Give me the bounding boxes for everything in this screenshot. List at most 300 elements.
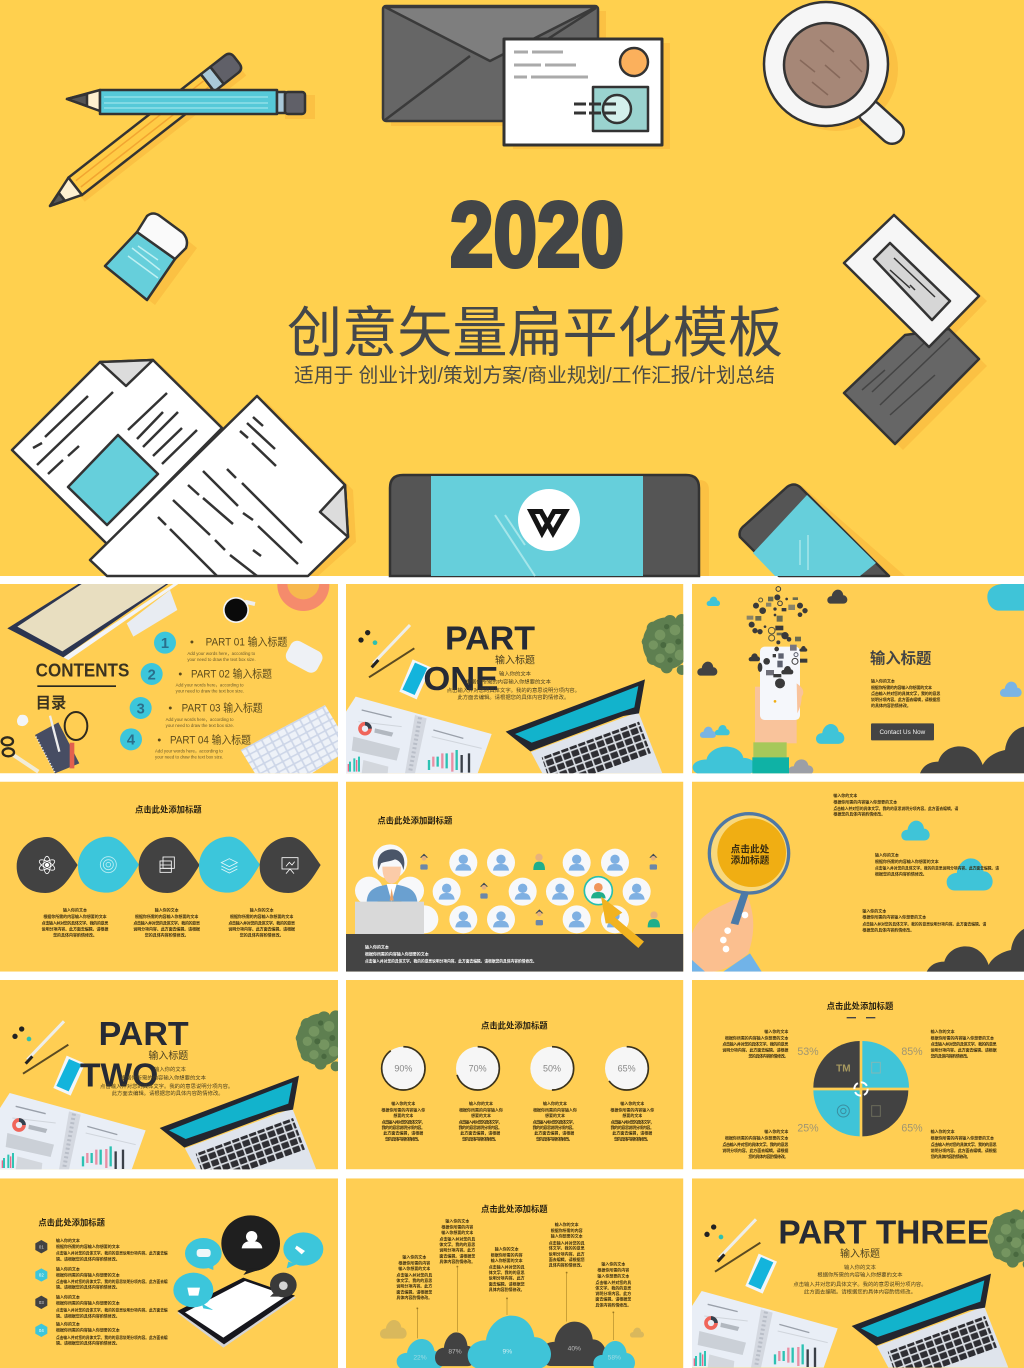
bubble: gamepad (185, 1238, 222, 1270)
agenda item 2: 2 (148, 667, 156, 683)
title: 点击此处添加标题 (481, 1021, 548, 1031)
body text: 根据你所需的内容输入你想要的文本 (871, 684, 932, 690)
body text: 此方面去编辑。请根据您的具体内容酌情修改。 (457, 693, 569, 701)
body text: 根据你所需的内容输入你想要的文本 (121, 1073, 207, 1081)
text block bottom left (722, 1128, 788, 1159)
hand holding phone (752, 647, 803, 774)
heading: part three: PART THREE (778, 1214, 989, 1251)
text column 1: 根据你所需的内容 (398, 1259, 430, 1265)
text block top right: 点击输入并对您的具体文字。我的的意思 (931, 1041, 997, 1047)
icon: yellow pencil (43, 51, 248, 220)
text block 2 (459, 1100, 503, 1141)
text block 1: 根据你所需的内容输入你想要的文本 (43, 913, 107, 919)
text column 3: 点击输入并对您的具 (489, 1264, 525, 1270)
button (871, 723, 934, 740)
icon: eraser (105, 214, 197, 305)
panel: contents slide (0, 584, 338, 774)
text column 5: 面去编辑。请根据您 (595, 1296, 631, 1302)
body text: 此方面去编辑。请根据您的具体内容酌情修改。 (112, 1089, 224, 1097)
ring 65% (605, 1047, 648, 1090)
heading: 输入标题 (870, 649, 931, 667)
text column 2: 输入你的文本 (445, 1217, 469, 1223)
drop 4 with layers icon (199, 837, 260, 893)
hero background (0, 0, 1024, 576)
text block 1 (42, 907, 108, 937)
text column 4: 输入你的文本 (555, 1221, 579, 1227)
text block 4: 您的具体内容酌情修改。 (614, 1135, 651, 1141)
text block 1: 根据你所需的内容输入你 (381, 1106, 425, 1112)
text block 3: 输入你的文本 (543, 1100, 567, 1106)
text block top left: 点击输入并对您的具体文字。我的的意思 (722, 1041, 788, 1047)
text column 5: 输入你想要的文本 (597, 1272, 629, 1278)
text block 3: 输入你的文本 (250, 907, 274, 913)
heading: part two: PART (99, 1016, 189, 1053)
band text: 点击输入并对您的具体文字。我的的意思说明分项内容。此方面去编辑。请根据您的具体内容酌情修改。 (365, 958, 537, 964)
leader lines (417, 1266, 614, 1340)
text block top left: 说明分项内容。此方面去编辑。请根据 (722, 1047, 788, 1053)
magnifier: 点击此处 (731, 844, 770, 856)
item 03 (35, 1294, 168, 1319)
bubble: user (221, 1215, 280, 1275)
text block 1: 根据你所需的内容输入你想要的文本 (833, 798, 897, 804)
icon: tablet with logo (390, 475, 709, 576)
agenda item 3: Add your words here，according to (166, 717, 234, 723)
item 03: 点击输入并对您的具体文字。我的的意思说明分项内容。此方面去编 (56, 1307, 168, 1313)
item 04 (35, 1321, 168, 1346)
text block 4: 我的的意思说明分项内容。 (611, 1124, 654, 1130)
body text (871, 677, 940, 708)
panel: cloud data slide (346, 1178, 683, 1368)
text column 3: 根据你所需的内容 (491, 1251, 523, 1257)
text block bottom right: 您的具体内容酌情修改。 (931, 1153, 971, 1159)
icon: business cards (844, 215, 987, 450)
text block top left: 根据你所需的内容输入你想要的文本 (725, 1035, 788, 1041)
text block bottom left: 说明分项内容。此方面去编辑。请根据 (722, 1147, 788, 1153)
item 01: 点击输入并对您的具体文字。我的的意思说明分项内容。此方面去编 (56, 1250, 168, 1256)
text block 1: 您的具体内容酌情修改。 (53, 931, 97, 937)
body text: 点击输入并对您的具体文字，我的的意思 (871, 690, 940, 696)
text block 4: 输入你的文本 (620, 1100, 644, 1106)
agenda item 4: Add your words here，according to (155, 749, 223, 755)
heading: part one (424, 626, 535, 690)
text column 4: 体文字。我的的意思 (549, 1245, 585, 1251)
text block bottom right: 说明分项内容。此方面去编辑。请根据 (931, 1147, 997, 1153)
text column 4: 输入你想要的文本 (551, 1233, 583, 1239)
item 03: 输入你的文本 (56, 1294, 80, 1300)
text column 3: 输入你想要的文本 (491, 1257, 523, 1263)
text column 1: 说明分项内容。此方 (396, 1283, 432, 1289)
item 01: 根据你所需的内容输入你想要的文本 (56, 1243, 120, 1249)
text block 2: 输入你的文本 (155, 907, 179, 913)
button: Contact Us Now (879, 729, 926, 736)
ring 50%: 50% (543, 1064, 561, 1074)
text block 1: 根据您的具体内容酌情修改。 (833, 811, 885, 817)
agenda item 2: Add your words here，according to (176, 683, 244, 689)
item 01: 输入你的文本 (56, 1237, 80, 1243)
item 02: 点击输入并对您的具体文字。我的的意思说明分项内容。此方面去编 (56, 1278, 168, 1284)
text block 1: 您的具体内容酌情修改。 (385, 1135, 422, 1141)
icon: postcard (504, 39, 670, 149)
text column 1: 点击输入并对您的具 (396, 1272, 432, 1278)
text block 4: 想要的文本 (622, 1112, 642, 1118)
text column 3: 说明分项内容。此方 (489, 1275, 525, 1281)
subtitle: 适用于 创业计划/策划方案/商业规划/工作汇报/计划总结 (294, 364, 775, 387)
item 02 (35, 1265, 168, 1290)
text block 3 (862, 907, 986, 932)
agenda item 3: • (168, 702, 172, 714)
ring 65%: 65% (618, 1064, 636, 1074)
panel: part one slide (346, 584, 691, 773)
fingers (720, 912, 748, 952)
agenda item 1 (154, 632, 287, 662)
title: 点击此处添加副标题 (377, 816, 453, 826)
year heading: 2020 (450, 184, 624, 286)
percentages: 65% (901, 1123, 923, 1135)
ring 90%: 90% (394, 1064, 412, 1074)
text block top right: 说明分项内容。此方面去编辑。请根据 (931, 1047, 997, 1053)
band text: 根据你所需的内容输入你想要的文本 (365, 951, 429, 957)
panel: phone slide (692, 584, 1024, 775)
item 02: 辑。请根据您的具体内容酌情修改。 (56, 1284, 120, 1290)
text block 2 (133, 907, 200, 937)
heading: part one: PART (445, 620, 535, 657)
text block 1 (833, 792, 958, 817)
body text: 此方面去编辑。请根据您的具体内容酌情修改。 (804, 1287, 916, 1295)
desk illustration (346, 614, 691, 773)
agenda item 1: • (190, 636, 194, 648)
text block 2: 输入你的文本 (469, 1100, 493, 1106)
ring 90% (382, 1047, 425, 1090)
text column 2: 输入你想要的文本 (441, 1229, 473, 1235)
desk illustration (0, 1010, 345, 1170)
body text: 根据你所需的内容输入你想要的文本 (466, 677, 552, 685)
body text: 的具体内容酌情修改。 (871, 702, 911, 708)
heading: contents (36, 664, 129, 710)
cloud values (413, 1345, 621, 1362)
text block top left: 输入你的文本 (764, 1028, 788, 1034)
hand (692, 898, 753, 972)
drop 1 with atom icon (17, 837, 78, 893)
percentages (797, 1046, 923, 1135)
drop 2 with target icon (78, 837, 139, 893)
title: 点击此处添加标题 (38, 1217, 106, 1227)
pie chart: TM (836, 1064, 851, 1075)
text column 5: 说明分项内容。此方 (595, 1290, 631, 1296)
agenda item 3: your need to draw the text box size. (166, 723, 234, 728)
item 02: 02 (39, 1273, 44, 1278)
clouds (380, 1316, 644, 1368)
body text (793, 1263, 927, 1295)
title (827, 1001, 894, 1018)
text block 2: 说明分项内容。此方面去编辑。请根据 (133, 925, 200, 931)
mouse (286, 640, 322, 673)
text block 3 (228, 907, 295, 937)
text block top right: 您的具体内容酌情修改。 (931, 1053, 971, 1059)
text block 1: 输入你的文本 (833, 792, 857, 798)
text block 1: 说明分项内容。此方面去编辑。请根据 (42, 925, 108, 931)
text block 3: 根据您的具体内容酌情修改。 (862, 926, 914, 932)
text block 2: 点击输入并对您的具体文字， (459, 1118, 502, 1124)
text column 4: 根据你所需的内容 (551, 1227, 583, 1233)
text block 3: 点击输入并对您的具体文字。我的的意思 (228, 920, 295, 926)
text block bottom left: 您的具体内容酌情修改。 (748, 1153, 788, 1159)
text block 4: 根据你所需的内容输入你 (610, 1106, 654, 1112)
item 03: 辑。请根据您的具体内容酌情修改。 (56, 1313, 120, 1319)
text block 3: 根据你所需的内容输入你想要的文本 (230, 913, 293, 919)
text column 4: 具体内容酌情修改。 (549, 1262, 585, 1268)
agenda item 4 (120, 728, 251, 760)
magnifier: 添加标题 (731, 854, 770, 866)
text block 3: 点击输入并对您的具体文字， (533, 1118, 576, 1124)
percentages: 53% (797, 1046, 819, 1058)
drop 3 with film icon (139, 837, 200, 893)
item 04: 输入你的文本 (56, 1321, 80, 1327)
text column 2: 具体内容酌情修改。 (439, 1258, 475, 1264)
text block 2: 您的具体内容酌情修改。 (145, 931, 189, 937)
icon: smartphone (740, 484, 905, 576)
item 01: 辑。请根据您的具体内容酌情修改。 (56, 1255, 120, 1261)
agenda item 2: PART 02 输入标题 (191, 666, 272, 680)
ring 50% (530, 1047, 574, 1090)
item 03: 03 (39, 1300, 44, 1305)
icon: teal pencil (67, 90, 315, 119)
text column 5: 点击输入并对您的具 (595, 1279, 631, 1285)
agenda item 2 (141, 663, 272, 694)
desk items illustration (2, 712, 87, 773)
item 03: 根据你所需的内容输入你想要的文本 (56, 1300, 120, 1306)
panel: part three slide (692, 1178, 1024, 1368)
cloud values: 22% (413, 1355, 427, 1362)
band text: 输入你的文本 (365, 943, 389, 949)
subheading: 输入标题 (148, 1049, 188, 1062)
pie chart (813, 1041, 909, 1136)
panel: pie chart slide (692, 980, 1024, 1169)
presenter illustration (355, 844, 438, 934)
text column 1: 面去编辑。请根据您 (396, 1288, 432, 1294)
agenda item 1: Add your words here，according to (187, 651, 256, 657)
panel: magnifier slide (692, 782, 1024, 973)
cloud values: 9% (503, 1349, 512, 1356)
agenda item 2: • (178, 668, 182, 680)
coffee cup (223, 597, 255, 623)
text column 1: 输入你想要的文本 (398, 1265, 430, 1271)
heading: part two: TWO (80, 1058, 158, 1095)
cloud values: 58% (608, 1355, 621, 1362)
text block 2: 根据你所需的内容输入你想要的文本 (135, 913, 198, 919)
bubble: basket (173, 1273, 213, 1310)
clouds (693, 584, 1024, 775)
agenda item 3 (130, 697, 263, 728)
icon: paper document 1 (12, 360, 230, 549)
heading: part one: ONE (423, 661, 498, 698)
agenda item 4: • (157, 734, 161, 746)
text column 4 (549, 1221, 585, 1268)
text column 3: 面去编辑。请根据您 (489, 1280, 525, 1286)
percentages: 85% (901, 1046, 923, 1058)
monitor illustration (7, 584, 178, 660)
panel: tablet bubbles slide (0, 1178, 338, 1368)
text block 1: 点击输入并对您的具体文字。我的的意思 (42, 920, 108, 926)
text column 1 (396, 1253, 432, 1300)
bubble: plug (283, 1232, 323, 1268)
text block 1: 输入你的文本 (63, 907, 87, 913)
text column 2: 体文字。我的的意思 (439, 1241, 475, 1247)
text block 1: 点击输入并对您的具体文字， (382, 1118, 425, 1124)
text block bottom left: 根据你所需的内容输入你想要的文本 (725, 1135, 788, 1141)
text block 3: 说明分项内容。此方面去编辑。请根据 (228, 925, 295, 931)
text block top right (931, 1028, 997, 1059)
text block 1: 点击输入并对您的具体文字。我的的意思说明分项内容。此方面去编辑。请 (833, 805, 958, 811)
heading: part two (80, 1016, 189, 1095)
ring 70% (456, 1047, 499, 1090)
text block top right: 根据你所需的内容输入你想要的文本 (931, 1035, 994, 1041)
avatar grid (420, 849, 660, 933)
highlighted avatar (584, 877, 612, 905)
text column 3 (489, 1245, 525, 1292)
text block 3 (533, 1100, 577, 1141)
body text: 输入你的文本 (154, 1065, 187, 1073)
panel: teardrop process slide (0, 782, 338, 972)
text block bottom left: 输入你的文本 (764, 1128, 788, 1134)
text block 2: 输入你的文本 (875, 852, 899, 858)
tablet (177, 1278, 296, 1348)
text block 4: 点击输入并对您的具体文字， (611, 1118, 654, 1124)
text column 2: 说明分项内容。此方 (439, 1247, 475, 1253)
keyboard (241, 705, 338, 773)
text block bottom right (931, 1128, 997, 1159)
text column 1: 具体内容酌情修改。 (396, 1294, 432, 1300)
agenda item 1: 1 (161, 636, 169, 652)
magnifier (709, 814, 789, 925)
text block 3: 根据你所需的内容输入你 (533, 1106, 577, 1112)
body text: 根据你所需的内容输入你想要的文本 (817, 1271, 903, 1279)
text column 1: 输入你的文本 (402, 1253, 426, 1259)
cloud values: 40% (568, 1345, 581, 1352)
alarm clock (277, 584, 330, 611)
agenda item 3: PART 03 输入标题 (182, 700, 263, 714)
text block 3: 输入你的文本 (862, 907, 886, 913)
text block 2: 根据您的具体内容酌情修改。 (875, 871, 927, 877)
text block 3: 您的具体内容酌情修改。 (536, 1135, 573, 1141)
item 01 (35, 1237, 168, 1261)
text block 4 (610, 1100, 654, 1141)
heading: contents: 目录 (36, 695, 66, 712)
text block 2 (875, 852, 999, 877)
text column 4: 点击输入并对您的具 (549, 1239, 585, 1245)
main title: 创意矢量扁平化模板 (287, 302, 783, 364)
item 04: 根据你所需的内容输入你想要的文本 (56, 1327, 120, 1333)
text block 3: 想要的文本 (545, 1112, 565, 1118)
agenda item 1: PART 01 输入标题 (206, 634, 287, 648)
heading: contents: CONTENTS (36, 660, 129, 681)
clouds (901, 821, 1024, 973)
text column 4: 说明分项内容。此方 (549, 1250, 585, 1256)
cursor arrow (601, 897, 644, 948)
text block 3: 此方面去编辑，请根据 (534, 1130, 574, 1136)
title: 点击此处添加标题 (481, 1204, 548, 1214)
text column 5: 具体内容酌情修改。 (595, 1301, 631, 1307)
text block 4: 此方面去编辑，请根据 (612, 1130, 652, 1136)
desk illustration (692, 1208, 1024, 1368)
text block 2: 根据你所需的内容输入你 (459, 1106, 503, 1112)
icon: coffee mug (764, 2, 898, 132)
text column 3: 具体内容酌情修改。 (489, 1286, 525, 1292)
text block 2: 我的的意思说明分项内容。 (459, 1124, 502, 1130)
text column 3: 输入你的文本 (495, 1245, 519, 1251)
agenda item 4: 4 (127, 733, 136, 749)
agenda item 3: 3 (137, 701, 145, 717)
icon: paper document 2 (90, 396, 356, 576)
text block 1: 想要的文本 (393, 1112, 413, 1118)
body text: 输入你的文本 (871, 677, 895, 683)
percentages: 25% (797, 1123, 819, 1135)
text block 3: 我的的意思说明分项内容。 (533, 1124, 576, 1130)
panel: people network slide (346, 782, 683, 972)
text block bottom left: 点击输入并对您的具体文字。我的的意思 (722, 1141, 788, 1147)
body text: 说明分项内容。此方面去编辑，请根据您 (871, 696, 940, 702)
body text: 输入你的文本 (844, 1263, 877, 1271)
text column 5: 输入你的文本 (601, 1261, 625, 1267)
text column 1: 体文字。我的的意思 (396, 1277, 432, 1283)
panel: part two slide (0, 980, 345, 1170)
drop 5 with board icon (260, 837, 321, 893)
band (346, 934, 683, 972)
text block 2: 想要的文本 (471, 1112, 491, 1118)
text block 1 (381, 1100, 425, 1141)
item 01: 01 (39, 1244, 44, 1249)
text block 2: 点击输入并对您的具体文字。我的的意思说明分项内容。此方面去编辑。请 (875, 865, 999, 871)
text column 2 (439, 1217, 475, 1264)
icon: envelope (383, 6, 606, 126)
agenda item 4: your need to draw the text box size. (155, 755, 223, 760)
bubble: flame (270, 1273, 297, 1297)
text block 3: 根据你所需的内容输入你想要的文本 (862, 914, 926, 920)
body text: 点击输入并对您的具体文字。我的的意思说明分项内容。 (100, 1082, 233, 1090)
text block bottom right: 点击输入并对您的具体文字。我的的意思 (931, 1141, 997, 1147)
body text (100, 1065, 233, 1097)
text column 4: 面去编辑。请根据您 (549, 1256, 585, 1262)
text block 3: 点击输入并对您的具体文字。我的的意思说明分项内容。此方面去编辑。请 (862, 920, 986, 926)
text block 2: 此方面去编辑，请根据 (460, 1130, 500, 1136)
text column 2: 根据你所需的内容 (441, 1223, 473, 1229)
text block top right: 输入你的文本 (931, 1028, 955, 1034)
item 04: 点击输入并对您的具体文字。我的的意思说明分项内容。此方面去编 (56, 1334, 168, 1340)
band text (365, 943, 537, 964)
text block 1: 我的的意思说明分项内容。 (382, 1124, 425, 1130)
text block bottom right: 输入你的文本 (931, 1128, 955, 1134)
title: 点击此处添加标题 (135, 805, 202, 815)
text column 2: 面去编辑。请根据您 (439, 1252, 475, 1258)
text block 2: 根据你所需的内容输入你想要的文本 (875, 858, 939, 864)
text block 2: 您的具体内容酌情修改。 (462, 1135, 499, 1141)
item 02: 根据你所需的内容输入你想要的文本 (56, 1271, 120, 1277)
text block top left (722, 1028, 788, 1059)
text block 1: 此方面去编辑，请根据 (383, 1130, 423, 1136)
text block bottom right: 根据你所需的内容输入你想要的文本 (931, 1135, 994, 1141)
item 04: 辑。请根据您的具体内容酌情修改。 (56, 1340, 120, 1346)
text block 2: 点击输入并对您的具体文字。我的的意思 (133, 920, 200, 926)
ring 70%: 70% (469, 1064, 487, 1074)
subheading: 输入标题 (840, 1247, 880, 1260)
body text: 点击输入并对您的具体文字。我的的意思说明分项内容。 (793, 1280, 927, 1288)
subheading: 输入标题 (495, 653, 535, 666)
agenda item 2: your need to draw the text box size. (176, 689, 244, 694)
item 02: 输入你的文本 (56, 1265, 80, 1271)
text column 5: 根据你所需的内容 (597, 1267, 629, 1273)
text column 5: 体文字。我的的意思 (595, 1284, 631, 1290)
text column 3: 体文字。我的的意思 (489, 1269, 525, 1275)
agenda item 1: your need to draw the text box size. (187, 657, 256, 662)
